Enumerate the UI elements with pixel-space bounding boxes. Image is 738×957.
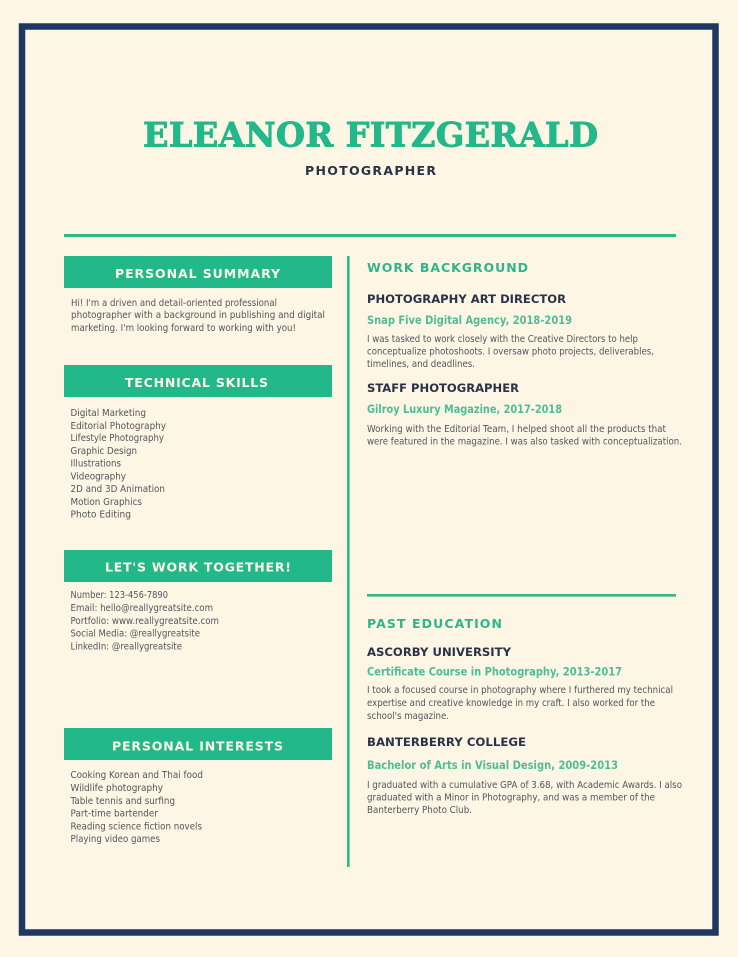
interests list: Part-time bartender [70,808,158,820]
school: banterberry college: graduated with a Minor in Photography, and was a member of the [367,792,655,804]
heading bar: personal interests [64,728,332,760]
job: photography art director [367,292,654,370]
school: ascorby university: expertise and creative knowledge in my craft. I also worked for the [367,698,655,709]
summary text: marketing. I'm looking forward to working with you! [71,323,296,334]
heading: past education: PAST EDUCATION [367,616,502,631]
skills list: Editorial Photography [70,421,166,432]
summary text: photographer with a background in publishing and digital [71,310,325,321]
school: banterberry college: Bachelor of Arts in Visual Design, 2009-2013 [367,758,618,772]
heading bar: technical skills: TECHNICAL SKILLS [125,375,268,390]
panel: work background [367,260,682,448]
interests list: Cooking Korean and Thai food [70,770,203,781]
skills list: Graphic Design [70,446,137,457]
heading bar: personal summary [64,256,332,288]
heading bar: let's work together [64,550,332,582]
panel: technical skills [64,365,332,520]
skills list: Digital Marketing [70,408,146,419]
job: photography art director: timelines, and deadlines. [367,359,475,370]
skills list: Videography [70,472,126,482]
header divider [64,234,676,237]
interests list: Reading science fiction novels [70,822,202,832]
skills list: 2D and 3D Animation [70,484,165,495]
section divider [367,594,676,597]
summary text: Hi! I'm a driven and detail-oriented professional [71,298,277,309]
skills list: Lifestyle Photography [70,433,164,444]
title: name: ELEANOR FITZGERALD [143,116,598,154]
heading bar: technical skills [64,365,332,397]
panel: contact [64,550,332,652]
contact details: Social Media: @reallygreatsite [70,628,200,640]
job: photography art director: PHOTOGRAPHY ART DIRECTOR [367,292,566,306]
panel: personal interests [64,728,332,845]
job: staff photographer: Working with the Editorial Team, I helped shoot all the products that [367,424,666,435]
contact details: Portfolio: www.reallygreatsite.com [70,616,219,627]
job: staff photographer: STAFF PHOTOGRAPHER [367,381,519,395]
heading bar: personal interests: PERSONAL INTERESTS [112,738,283,754]
interests list: Wildlife photography [70,783,163,794]
subtitle: job title: PHOTOGRAPHER [305,163,436,178]
contact details [70,590,219,652]
heading: work background: WORK BACKGROUND [367,260,528,275]
summary text [71,298,325,334]
panel: personal summary [64,256,332,334]
school: ascorby university: Certificate Course in Photography, 2013-2017 [367,664,622,678]
job: staff photographer: were featured in the magazine. I was also tasked with conceptualization. [367,436,682,448]
heading bar: let's work together: LET'S WORK TOGETHER! [105,560,291,574]
school: ascorby university: I took a focused course in photography where I furthered my technical [367,685,673,696]
skills list: Motion Graphics [70,497,142,508]
column divider [347,256,350,867]
school: banterberry college [367,735,682,816]
header [143,116,598,178]
job: photography art director: conceptualize photoshoots. I oversaw photo projects, deliverables, [367,346,654,358]
school: ascorby university: ASCORBY UNIVERSITY [367,645,512,659]
job: photography art director: I was tasked to work closely with the Creative Directors to help [367,334,638,345]
interests list [70,770,203,845]
contact details: LinkedIn: @reallygreatsite [70,642,182,652]
job: photography art director: Snap Five Digital Agency, 2018-2019 [367,313,572,327]
school: banterberry college: I graduated with a cumulative GPA of 3.68, with Academic Awards. I also [367,780,682,791]
job: staff photographer [367,381,682,448]
panel: past education [367,616,682,816]
school: banterberry college: Banterberry Photo Club. [367,805,472,816]
interests list: Table tennis and surfing [70,796,175,807]
school: ascorby university [367,645,673,722]
job: staff photographer: Gilroy Luxury Magazine, 2017-2018 [367,402,562,416]
skills list [70,408,166,520]
skills list: Illustrations [70,458,121,470]
skills list: Photo Editing [70,510,131,520]
heading bar: personal summary: PERSONAL SUMMARY [115,266,281,281]
school: banterberry college: BANTERBERRY COLLEGE [367,735,526,749]
interests list: Playing video games [70,834,160,845]
contact details: Number: 123-456-7890 [70,590,168,601]
contact details: Email: hello@reallygreatsite.com [70,603,213,614]
school: ascorby university: school's magazine. [367,711,449,722]
